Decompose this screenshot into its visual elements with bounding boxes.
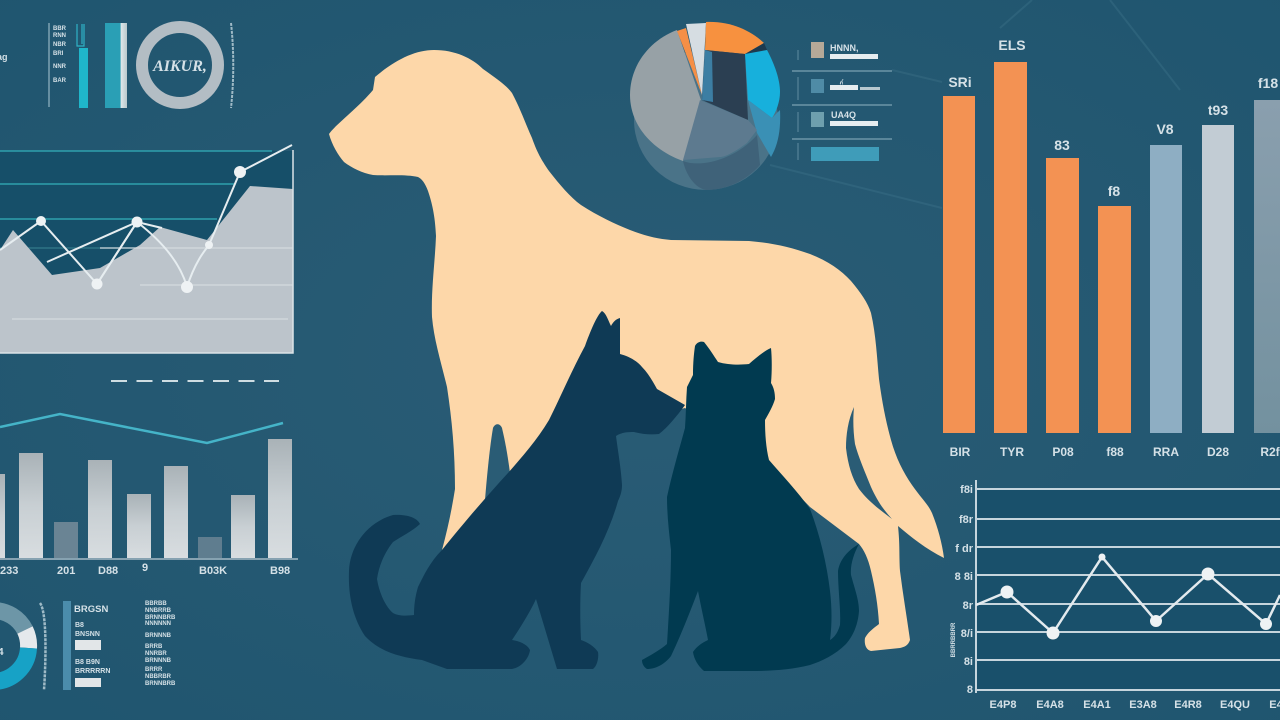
cyan slice (745, 50, 780, 118)
mini legend with bar strips: BAR (53, 78, 67, 84)
legend: B8 B9N (75, 659, 100, 666)
grey slice (630, 30, 702, 161)
axis labels: 9 (142, 562, 148, 574)
x labels: E4R8 (1174, 699, 1202, 711)
axis labels: 233 (0, 565, 18, 577)
panel: lower-left bar chart (0, 414, 298, 577)
panel: pie legend (792, 42, 892, 161)
white slice (686, 23, 706, 95)
large orange slice (705, 22, 764, 54)
legend: B8 (75, 622, 84, 629)
legend item 2: ᵢ⁄ᵢ (839, 79, 844, 86)
notes: BBRBB (145, 601, 167, 607)
mini legend with bar strips: NNR (53, 64, 67, 70)
mini legend with bar strips: RNN (53, 33, 66, 39)
pie shadow disc (634, 50, 778, 190)
dark dog silhouette (349, 311, 685, 669)
axis labels: TYR (1000, 445, 1024, 459)
value labels: 83 (1054, 137, 1070, 153)
panel: lower-left donut and legend (0, 601, 176, 690)
blue slice (702, 50, 713, 102)
big dog silhouette (329, 50, 944, 651)
value labels: t93 (1208, 102, 1228, 118)
panel: lower-right line chart (951, 480, 1280, 711)
legend: BRRRRRN (75, 668, 110, 675)
notes: BRNNNB (145, 633, 172, 639)
axis labels: 201 (57, 565, 75, 577)
axis labels: R2f (1260, 445, 1280, 459)
y labels: 8i (964, 656, 973, 668)
slate slice (683, 100, 757, 160)
legend item 1: HNNN, (830, 43, 858, 53)
mini legend with bar strips: NBR (53, 42, 67, 48)
cat silhouette (642, 342, 859, 671)
notes: NNBRRB (145, 608, 172, 614)
tail gap (846, 407, 892, 519)
notes: BRNNBRB (145, 681, 176, 687)
value labels: f18 (1258, 75, 1278, 91)
notes: BRRR (145, 667, 163, 673)
axes and grid (976, 480, 1280, 693)
legend (63, 601, 110, 690)
x labels: E4A1 (1083, 699, 1111, 711)
mini legend with bar strips: BBR (53, 26, 67, 32)
white data line (0, 145, 292, 287)
data points (1000, 554, 1272, 640)
y labels: f8r (959, 514, 974, 526)
y labels: 8r (963, 600, 974, 612)
legend: BRGSN (74, 604, 108, 615)
legend item 4 (811, 147, 879, 161)
axis labels: D88 (98, 565, 118, 577)
ring gauge (142, 27, 218, 103)
y labels: f dr (955, 543, 974, 555)
mini legend with bar strips: BRI (53, 51, 64, 57)
value labels: SRi (948, 74, 972, 90)
axis labels: B98 (270, 565, 290, 577)
value labels: f8 (1108, 183, 1120, 199)
leg gap (485, 424, 510, 500)
notes (145, 601, 176, 687)
blue and grey bars (1150, 100, 1280, 433)
axis labels (0, 562, 290, 577)
orange bars (943, 62, 1131, 433)
axis labels: B03K (199, 565, 227, 577)
dashed separator (111, 380, 279, 382)
x labels (990, 699, 1280, 711)
y labels: f8i (960, 484, 973, 496)
y labels: 8/i (961, 628, 973, 640)
ring gauge: AIKUR, (152, 58, 207, 75)
grey area (0, 186, 293, 353)
bars (0, 439, 292, 558)
notes: BRNNBRB (145, 615, 176, 621)
x labels: E4A8 (1036, 699, 1064, 711)
legend: BNSNN (75, 631, 100, 638)
y labels (955, 484, 974, 696)
data points (36, 166, 246, 293)
x labels: E4P8 (990, 699, 1016, 711)
notes: NNRBR (145, 651, 167, 657)
notes: BRRB (145, 644, 163, 650)
axis labels (950, 445, 1280, 459)
legend item 3: UA4Q (831, 110, 856, 120)
notes: BRNNNB (145, 658, 172, 664)
axis labels: f88 (1106, 445, 1124, 459)
navy slice (702, 50, 748, 120)
dark sliver (745, 43, 767, 60)
axis labels: D28 (1207, 445, 1229, 459)
mid blue slice (748, 100, 780, 157)
mini legend with bar strips (49, 23, 127, 108)
x labels: E3A8 (1129, 699, 1157, 711)
notes: NNNNNN (145, 621, 171, 627)
axis labels: RRA (1153, 445, 1179, 459)
teal trend line (0, 414, 283, 443)
y labels: 8 (967, 684, 973, 696)
axis labels: BIR (950, 445, 971, 459)
panel: pie chart (630, 22, 780, 190)
value labels (948, 37, 1278, 199)
notes: NBBRBR (145, 674, 172, 680)
axis labels: P08 (1052, 445, 1074, 459)
value labels: ELS (998, 37, 1026, 53)
x labels: E4QU (1220, 699, 1250, 711)
donut (0, 610, 29, 682)
orange slice (677, 28, 702, 95)
panel: lower-right line chart: BBRRBBRR (951, 622, 957, 657)
white data line (976, 557, 1280, 633)
panel: top-left mini charts (0, 23, 233, 108)
panel: right bar chart (943, 37, 1280, 459)
y labels: 8 8i (955, 571, 973, 583)
panel: area and line chart (0, 145, 293, 353)
value labels: V8 (1156, 121, 1174, 137)
